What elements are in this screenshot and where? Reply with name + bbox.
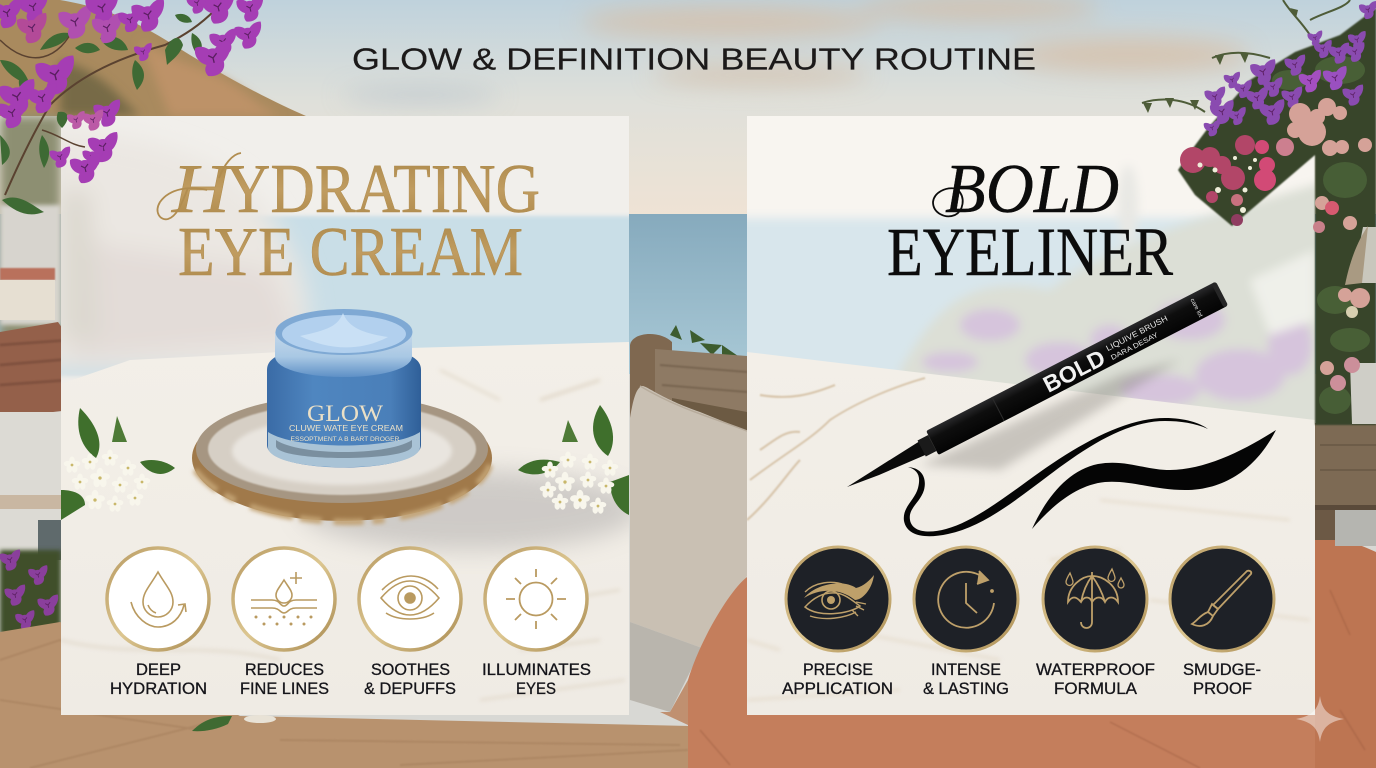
icon: reduces fine lines bbox=[233, 548, 335, 650]
wooden table bbox=[0, 622, 690, 768]
right foliage wall with flowers bbox=[1142, 0, 1376, 425]
chair seat bbox=[630, 622, 702, 712]
labels: left panel benefits: EYES bbox=[516, 680, 556, 698]
panel: hydrating eye cream bbox=[40, 116, 650, 715]
eyeliner pen bbox=[841, 281, 1228, 499]
marble veins bbox=[747, 378, 925, 520]
plant behind chair bbox=[670, 325, 738, 356]
labels: left panel benefits: SOOTHES bbox=[371, 661, 450, 679]
labels: left panel benefits: DEEP bbox=[136, 661, 181, 679]
labels: right panel benefits: & LASTING bbox=[923, 680, 1009, 698]
pen label: LIQUIVE BRUSH bbox=[1105, 314, 1169, 353]
labels: right panel benefits: SMUDGE- bbox=[1183, 661, 1261, 679]
heading: hydrating eye cream: H bbox=[171, 151, 234, 228]
icon: soothes and depuffs bbox=[359, 548, 461, 650]
marble veins bbox=[60, 370, 625, 700]
labels: right panel benefits: FORMULA bbox=[1054, 680, 1137, 698]
marble table top bbox=[80, 342, 629, 378]
eyeliner swatch strokes bbox=[904, 418, 1276, 536]
labels: right panel benefits: WATERPROOF bbox=[1036, 661, 1155, 679]
linen cushion bbox=[630, 386, 747, 648]
white flowers left bbox=[61, 408, 175, 520]
labels: left panel benefits: REDUCES bbox=[245, 661, 324, 679]
table shadow bbox=[300, 470, 640, 550]
labels: left panel benefits: & DEPUFFS bbox=[364, 680, 456, 698]
icon: deep hydration bbox=[107, 548, 209, 650]
pale wall and drape bbox=[1345, 226, 1376, 424]
icon: intense and lasting bbox=[914, 547, 1018, 651]
jar label: CLUWE WATE EYE CREAM bbox=[289, 424, 403, 433]
labels: left panel benefits: HYDRATION bbox=[110, 680, 207, 698]
right wood railing bbox=[1315, 423, 1376, 546]
icon: waterproof formula bbox=[1043, 547, 1147, 651]
agate stone coaster bbox=[192, 395, 492, 522]
marble table top bbox=[747, 352, 1315, 715]
labels: left panel benefits: ILLUMINATES bbox=[482, 661, 591, 679]
jar label bbox=[289, 406, 402, 441]
labels: left panel benefits: FINE LINES bbox=[240, 680, 329, 698]
pen label: DARA DESAY bbox=[1110, 332, 1160, 362]
left terrace roof and wall bbox=[0, 322, 115, 560]
wooden chair bbox=[630, 334, 747, 432]
labels: right panel benefits bbox=[782, 661, 1261, 698]
blurred hillside and town bbox=[40, 130, 308, 370]
white flowers right bbox=[518, 405, 629, 515]
cream jar bbox=[267, 309, 421, 468]
labels: right panel benefits: APPLICATION bbox=[782, 680, 893, 698]
panel: bold eyeliner bbox=[735, 116, 1335, 715]
icon: sparkle watermark bbox=[1296, 696, 1344, 742]
blurred foliage behind panel bbox=[900, 169, 1315, 420]
purple flowers lower left bbox=[0, 550, 61, 635]
pen label: BOLD bbox=[1039, 344, 1109, 398]
stems and leaf under panel bbox=[192, 715, 276, 731]
heading: bold eyeliner bbox=[887, 151, 1173, 290]
pen shadow bbox=[920, 360, 1180, 470]
twigs bbox=[1142, 0, 1350, 112]
left flower branch bbox=[0, 0, 263, 214]
pen label: care lot bbox=[1189, 298, 1203, 319]
title: GLOW & DEFINITION BEAUTY ROUTINE bbox=[352, 42, 1036, 76]
terracotta wall bbox=[660, 536, 1376, 768]
heading: hydrating eye cream: EYE CREAM bbox=[178, 214, 523, 291]
heading: bold eyeliner: BOLD bbox=[945, 151, 1119, 228]
heading: hydrating eye cream: YDRATING bbox=[226, 151, 540, 228]
labels: right panel benefits: INTENSE bbox=[931, 661, 1001, 679]
icon: precise application bbox=[786, 547, 890, 651]
blurred sea behind panel bbox=[747, 215, 1203, 370]
labels: right panel benefits: PRECISE bbox=[803, 661, 873, 679]
icon: illuminates eyes bbox=[485, 548, 587, 650]
heading: bold eyeliner: EYELINER bbox=[887, 214, 1173, 290]
blurred sea behind panel bbox=[50, 216, 650, 376]
icon: smudge-proof bbox=[1170, 547, 1274, 651]
pen label bbox=[1039, 295, 1204, 398]
labels: left panel benefits bbox=[110, 661, 591, 698]
jar label: GLOW bbox=[307, 401, 383, 426]
heading: hydrating eye cream bbox=[158, 151, 540, 291]
labels: right panel benefits: PROOF bbox=[1193, 680, 1252, 698]
jar label: ESSOPTMENT A B BART DROGER bbox=[290, 436, 400, 443]
